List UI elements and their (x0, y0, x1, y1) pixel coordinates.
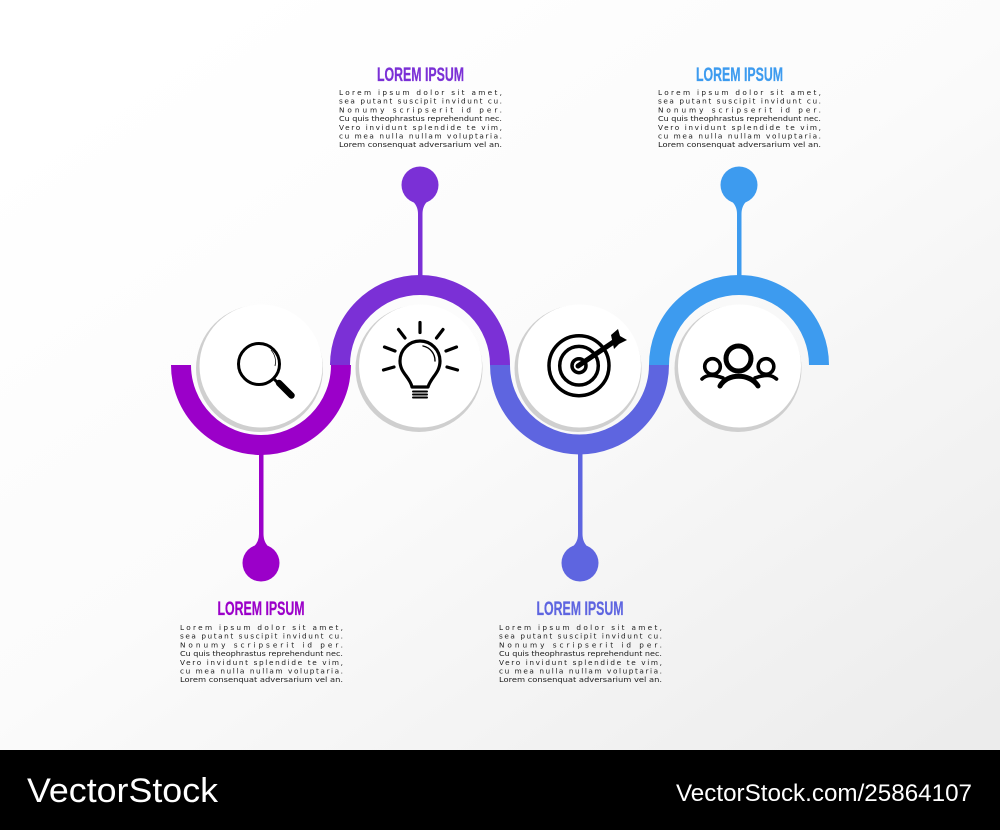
circle badge: step 2 (356, 304, 482, 432)
timeline arc: step 4 (659, 285, 819, 365)
footer bar: VectorStock (27, 772, 219, 810)
text block: step 4: cu mea nulla nullam voluptaria. (658, 132, 821, 140)
timeline arc: step 2 (340, 285, 500, 365)
text block: step 2: sea putant suscipit invidunt cu. (339, 97, 502, 106)
text block: step 4: LOREM IPSUM (696, 65, 783, 86)
text block: step 4: Vero invidunt splendide te vim, (658, 123, 821, 132)
text block: step 1: Nonumy scripserit id per. (180, 640, 343, 649)
circle badge: step 3 (514, 304, 642, 432)
text block: step 4: Lorem ipsum dolor sit amet, (658, 88, 821, 97)
text block: step 1: LOREM IPSUM (218, 599, 304, 620)
text block: step 3: Lorem ipsum dolor sit amet, (499, 623, 662, 632)
text block: step 3: Nonumy scripserit id per. (499, 640, 662, 649)
text block: step 4: Nonumy scripserit id per. (658, 105, 821, 114)
circle badge: step 4 (674, 304, 802, 432)
text block: step 1: Vero invidunt splendide te vim, (180, 658, 343, 667)
text block: step 3: sea putant suscipit invidunt cu. (499, 632, 662, 641)
footer bar: VectorStock.com/25864107 (676, 780, 972, 807)
text block: step 1: cu mea nulla nullam voluptaria. (180, 666, 343, 676)
pin: step 1 (242, 450, 280, 582)
text block: step 2: Lorem ipsum dolor sit amet, (339, 88, 502, 97)
text block: step 1: Cu quis theophrastus reprehendunt nec. (180, 649, 343, 658)
text block: step 4: sea putant suscipit invidunt cu. (658, 97, 821, 106)
text block: step 1: Lorem ipsum dolor sit amet, (180, 623, 343, 632)
text block: step 3: Cu quis theophrastus reprehendunt nec. (499, 649, 662, 658)
text block: step 2: Cu quis theophrastus reprehendunt nec. (339, 114, 502, 123)
circle badge: step 1 (196, 304, 323, 432)
pin: step 3 (562, 450, 598, 582)
text block: step 4: Cu quis theophrastus reprehendunt nec. (658, 114, 821, 123)
text block: step 4 (658, 65, 821, 149)
footer bar (0, 750, 1000, 830)
icon: group of people (702, 346, 776, 386)
text block: step 3: LOREM IPSUM (536, 599, 624, 620)
text block: step 3: Vero invidunt splendide te vim, (499, 658, 662, 667)
text block: step 3: cu mea nulla nullam voluptaria. (499, 666, 662, 676)
text block: step 2 (339, 65, 502, 149)
timeline arc: step 3 (500, 365, 659, 444)
pin: step 2 (402, 166, 438, 280)
icon: target with arrow (549, 329, 627, 396)
text block: step 3: Lorem consenquat adversarium vel an. (499, 675, 662, 684)
text block: step 2: Vero invidunt splendide te vim, (339, 123, 502, 132)
text block: step 2: Nonumy scripserit id per. (339, 105, 502, 114)
icon: light bulb (384, 322, 458, 398)
pin: step 4 (720, 166, 758, 280)
timeline arc: step 1 (181, 365, 341, 445)
text block: step 4: Lorem consenquat adversarium vel an. (658, 140, 821, 149)
text block: step 2: cu mea nulla nullam voluptaria. (339, 132, 502, 140)
text block: step 1 (180, 599, 343, 684)
text block: step 2: Lorem consenquat adversarium vel an. (339, 140, 502, 149)
text block: step 2: LOREM IPSUM (377, 65, 464, 86)
text block: step 3 (499, 599, 662, 684)
icon: magnifier (238, 344, 292, 396)
text block: step 1: sea putant suscipit invidunt cu. (180, 632, 343, 641)
text block: step 1: Lorem consenquat adversarium vel an. (180, 675, 343, 684)
